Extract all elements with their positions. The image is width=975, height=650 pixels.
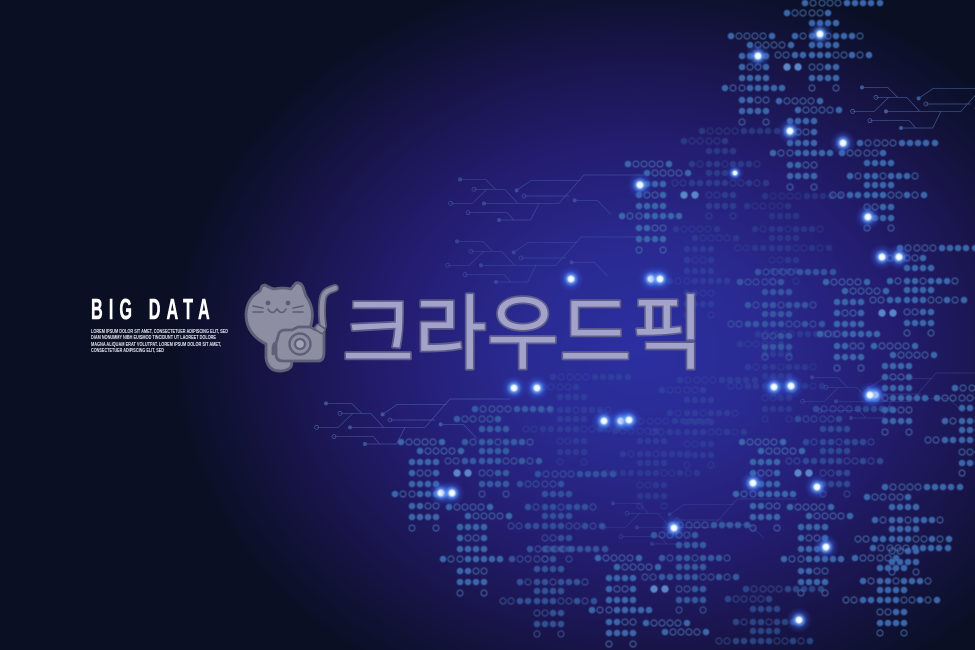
dot matrix: bottom centre group bbox=[592, 522, 821, 647]
watermark: cat with camera bbox=[246, 283, 335, 371]
body text: CONSECTETUER ADIPISCING ELIT, SED bbox=[91, 348, 164, 354]
dot matrix: upper centre group bbox=[622, 128, 833, 360]
body text: DIAM NONUMMY NIBH EUISMOD TINCIDUNT UT LAOREET DOLORE bbox=[91, 335, 216, 341]
watermark: wordmark fill: 크라우드픽 bbox=[342, 289, 704, 380]
dot matrix: top right group bbox=[725, 0, 935, 231]
dot matrix: faded central clusters bbox=[523, 193, 840, 509]
icon: cat face bbox=[253, 301, 303, 312]
dot matrix: lower right group bbox=[736, 406, 960, 636]
dot matrix: right edge group bbox=[820, 245, 975, 476]
watermark: wordmark outline: 크라우드픽 bbox=[342, 289, 704, 380]
body text: MAGNA ALIQUAM ERAT VOLUTPAT. LOREM IPSUM DOLOR SIT AMET, bbox=[91, 342, 221, 348]
glowing nodes bbox=[428, 21, 912, 633]
title: BIG DATA bbox=[91, 293, 210, 325]
body text bbox=[91, 329, 228, 354]
icon: camera bbox=[273, 324, 326, 361]
circuit lines bbox=[315, 83, 975, 546]
body text: LOREM IPSUM DOLOR SIT AMET, CONSECTETUER ADIPISCING ELIT, SED bbox=[91, 329, 228, 335]
icon: camera strap bbox=[322, 288, 335, 326]
icon: cat body bbox=[246, 283, 312, 371]
dot matrix: lower left group bbox=[395, 406, 613, 637]
